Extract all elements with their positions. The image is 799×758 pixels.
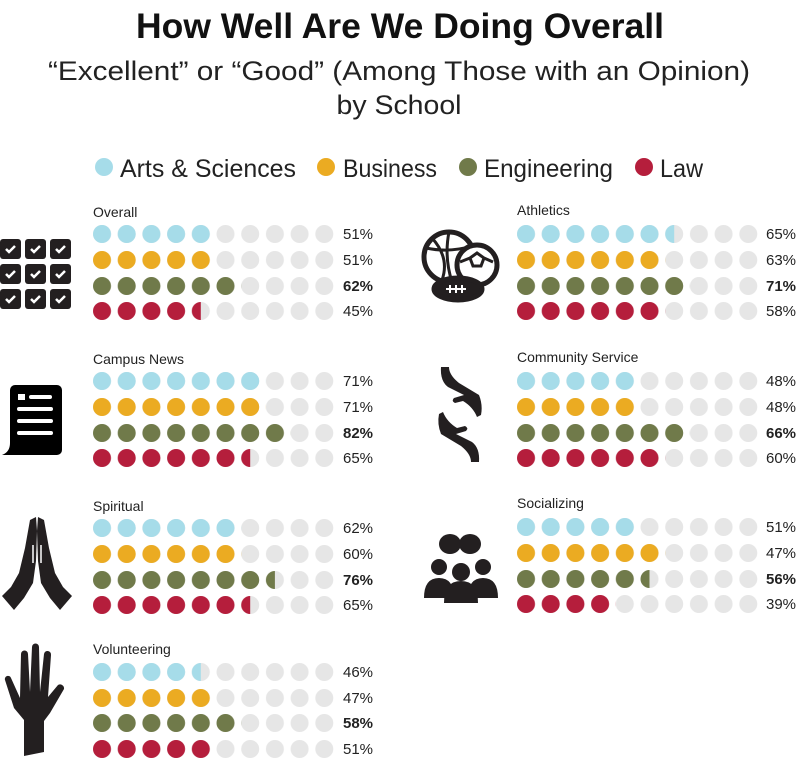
panel: overall: 45% bbox=[343, 303, 373, 320]
panel: community service bbox=[438, 349, 796, 467]
subtitle: by School bbox=[336, 90, 462, 120]
icon: raised hand bbox=[5, 644, 64, 756]
panel: campus news: Campus News bbox=[93, 351, 184, 367]
icon: praying hands bbox=[2, 517, 72, 610]
panel: overall bbox=[0, 204, 373, 320]
panel: socializing: 39% bbox=[766, 596, 796, 613]
panel: community service: 66% bbox=[766, 425, 796, 442]
panel: volunteering: 46% bbox=[343, 664, 373, 681]
panel: spiritual bbox=[2, 498, 373, 614]
panel: athletics: 58% bbox=[766, 303, 796, 320]
legend: Arts & Sciences bbox=[120, 155, 296, 183]
panel: socializing: 51% bbox=[766, 519, 796, 536]
panel: socializing: Socializing bbox=[517, 495, 584, 511]
panel: volunteering bbox=[5, 641, 373, 758]
icon: sports balls bbox=[424, 232, 497, 300]
panel: campus news: 65% bbox=[343, 450, 373, 467]
subtitle bbox=[48, 56, 750, 120]
panel: athletics bbox=[424, 202, 796, 320]
panel: overall: 51% bbox=[343, 252, 373, 269]
panel: spiritual: 62% bbox=[343, 520, 373, 537]
panel: athletics: Athletics bbox=[517, 202, 570, 218]
panel: socializing: 47% bbox=[766, 545, 796, 562]
panel: spiritual: 60% bbox=[343, 546, 373, 563]
icon: checklist grid bbox=[0, 239, 71, 309]
panel: volunteering: Volunteering bbox=[93, 641, 171, 657]
legend: Business bbox=[343, 155, 437, 183]
panel: socializing bbox=[424, 495, 796, 613]
panel: overall: 51% bbox=[343, 226, 373, 243]
panel: campus news: 71% bbox=[343, 399, 373, 416]
panel: overall: 62% bbox=[343, 278, 373, 295]
icon: newspaper bbox=[2, 385, 62, 455]
panel: spiritual: Spiritual bbox=[93, 498, 144, 514]
panel: spiritual: 65% bbox=[343, 597, 373, 614]
panel: campus news: 71% bbox=[343, 373, 373, 390]
panel: athletics: 65% bbox=[766, 226, 796, 243]
panel: socializing: 56% bbox=[766, 571, 796, 588]
panel: campus news bbox=[2, 351, 373, 467]
panel: volunteering: 58% bbox=[343, 715, 373, 732]
panel: overall: Overall bbox=[93, 204, 137, 220]
panel: volunteering: 51% bbox=[343, 741, 373, 758]
panel: community service: 48% bbox=[766, 373, 796, 390]
panel: athletics: 63% bbox=[766, 252, 796, 269]
icon: helping hands bbox=[438, 367, 482, 462]
legend: Law bbox=[660, 155, 704, 183]
panel: campus news: 82% bbox=[343, 425, 373, 442]
panel: community service: 60% bbox=[766, 450, 796, 467]
panel: community service: 48% bbox=[766, 399, 796, 416]
legend bbox=[95, 155, 704, 183]
legend: Engineering bbox=[484, 155, 613, 183]
panel: community service: Community Service bbox=[517, 349, 639, 365]
panel: athletics: 71% bbox=[766, 278, 796, 295]
panel: spiritual: 76% bbox=[343, 572, 373, 589]
icon: people group bbox=[424, 534, 498, 603]
panel: volunteering: 47% bbox=[343, 690, 373, 707]
subtitle: “Excellent” or “Good” (Among Those with an Opinion) bbox=[48, 56, 750, 86]
title: How Well Are We Doing Overall bbox=[136, 7, 664, 46]
